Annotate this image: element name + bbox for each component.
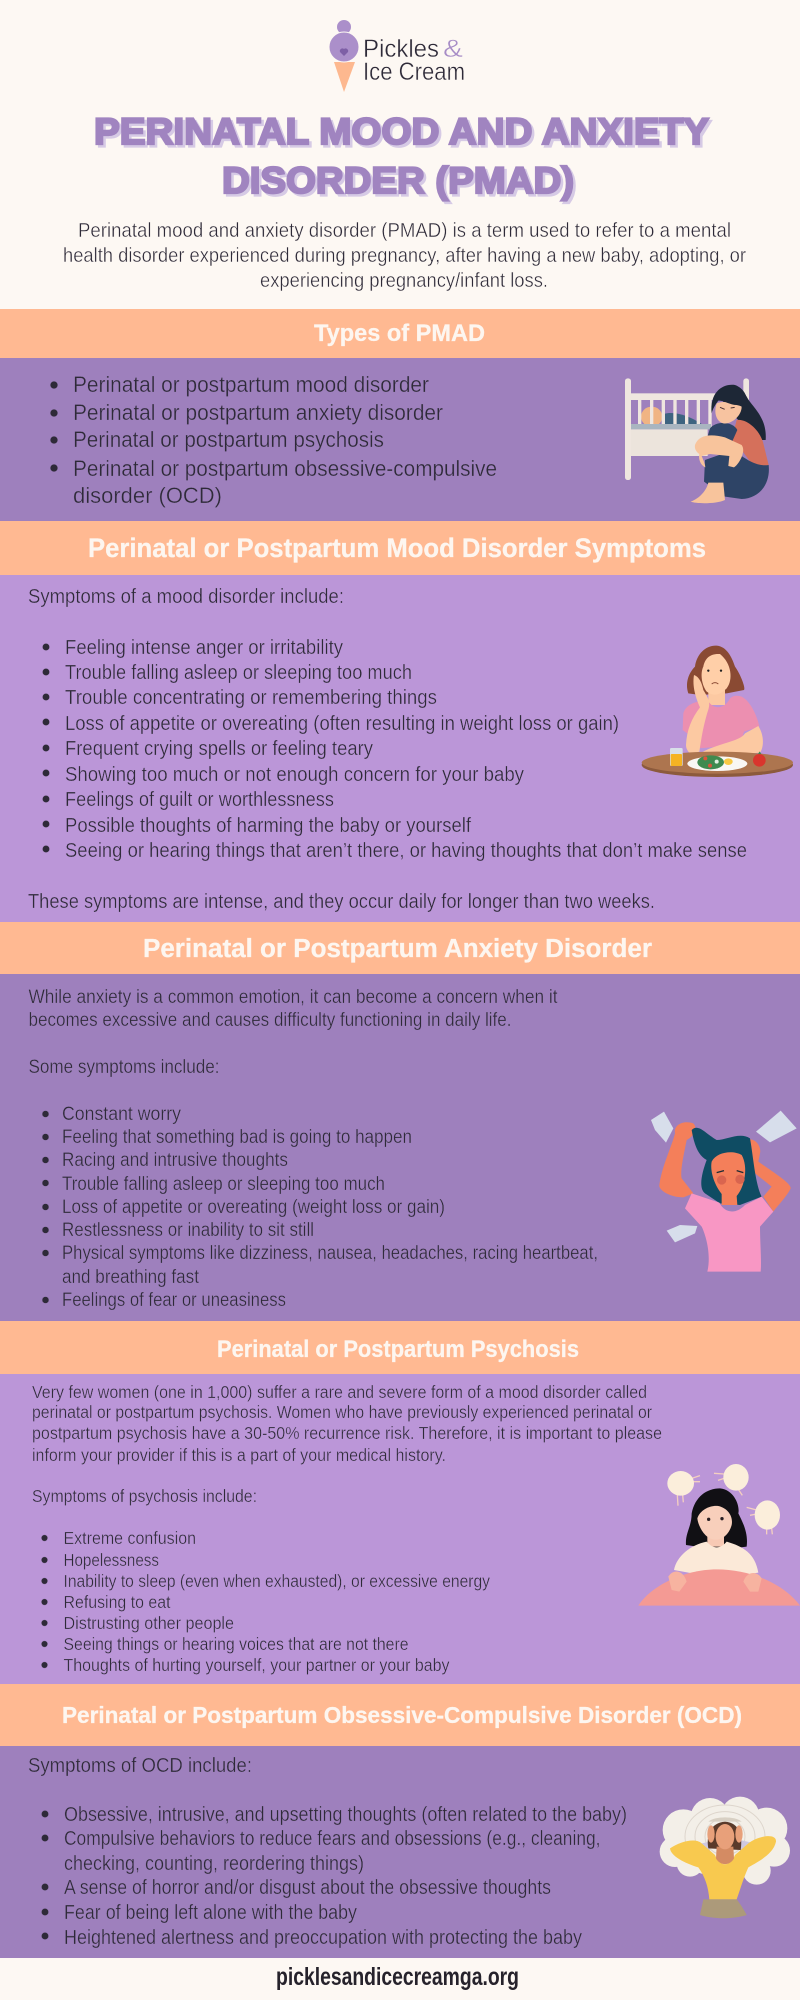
mood closing text: These symptoms are intense, and they occur daily for longer than two weeks. — [28, 891, 655, 913]
OCD symptom list: A sense of horror and/or disgust about the obsessive thoughts — [64, 1877, 551, 1899]
illustration: woman sitting beside crib — [625, 378, 769, 503]
anxiety intro text: becomes excessive and causes difficulty functioning in daily life. — [28, 1010, 512, 1031]
OCD symptom list: Heightened alertness and preoccupation with protecting the baby — [64, 1927, 582, 1949]
psychosis symptom list: Inability to sleep (even when exhausted), or excessive energy — [64, 1571, 490, 1591]
anxiety symptom list: and breathing fast — [62, 1267, 200, 1288]
mood symptom list — [42, 637, 747, 862]
icon: ice cream cone figure — [329, 20, 359, 92]
types list: Perinatal or postpartum anxiety disorder — [73, 400, 443, 425]
anxiety symptom list: Physical symptoms like dizziness, nausea, headaches, racing heartbeat, — [62, 1243, 598, 1264]
psychosis symptom list: Extreme confusion — [64, 1528, 196, 1548]
mood intro text: Symptoms of a mood disorder include: — [28, 586, 344, 608]
heading band: mood disorder symptoms: Perinatal or Postpartum Mood Disorder Symptoms — [88, 533, 706, 563]
anxiety symptom list: Racing and intrusive thoughts — [62, 1150, 288, 1171]
title — [94, 111, 712, 204]
intro paragraph: Perinatal mood and anxiety disorder (PMAD) is a term used to refer to a mental — [78, 219, 731, 242]
illustration: sad woman at table — [642, 646, 793, 777]
mood symptom list: Feelings of guilt or worthlessness — [65, 789, 334, 811]
heading band: Types of PMAD: Types of PMAD — [314, 320, 485, 347]
anxiety intro text: While anxiety is a common emotion, it can become a concern when it — [28, 987, 558, 1008]
psychosis panel body — [0, 1374, 800, 1684]
title: PERINATAL MOOD AND ANXIETY — [96, 114, 712, 154]
psychosis symptom list — [41, 1528, 490, 1675]
panel: anxiety disorder — [0, 922, 800, 1321]
OCD panel body — [0, 1746, 800, 1958]
panel: OCD — [0, 1684, 800, 1958]
OCD symptom list: Obsessive, intrusive, and upsetting thoughts (often related to the baby) — [64, 1804, 627, 1826]
anxiety intro text: Some symptoms include: — [28, 1057, 220, 1078]
logo wordmark: Pickles — [363, 35, 439, 63]
anxiety symptom list: Feeling that something bad is going to happen — [62, 1127, 412, 1148]
panel: types of PMAD — [0, 309, 800, 521]
illustration: overwhelmed woman holding head — [660, 1797, 790, 1918]
OCD symptom list — [41, 1804, 627, 1949]
panel: mood disorder symptoms — [0, 521, 800, 922]
logo: Pickles & Ice Cream — [329, 20, 465, 92]
illustration: stressed woman pulling hair — [651, 1111, 797, 1272]
heading band: anxiety disorder — [0, 922, 800, 974]
types list: disorder (OCD) — [73, 483, 222, 508]
heading band: OCD — [0, 1684, 800, 1746]
mood symptom list: Showing too much or not enough concern for your baby — [65, 764, 524, 786]
mood symptom list: Trouble concentrating or remembering things — [65, 687, 437, 709]
types list: Perinatal or postpartum obsessive-compulsive — [73, 456, 497, 481]
psychosis symptom list: Thoughts of hurting yourself, your partner or your baby — [64, 1655, 450, 1675]
logo wordmark: Ice Cream — [363, 58, 465, 86]
heading band: psychosis: Perinatal or Postpartum Psychosis — [217, 1336, 579, 1363]
title: PERINATAL MOOD AND ANXIETY — [94, 111, 709, 152]
logo wordmark — [363, 35, 465, 86]
types list: Perinatal or postpartum psychosis — [73, 427, 384, 452]
psychosis paragraph: postpartum psychosis have a 30-50% recurrence risk. Therefore, it is important to please — [32, 1423, 662, 1443]
mood symptom list: Frequent crying spells or feeling teary — [65, 738, 373, 760]
psychosis symptom list: Hopelessness — [64, 1550, 159, 1570]
types list — [50, 372, 497, 508]
anxiety symptom list — [42, 1104, 598, 1311]
heading band: anxiety disorder: Perinatal or Postpartum Anxiety Disorder — [143, 935, 652, 963]
mood panel body — [0, 575, 800, 922]
intro paragraph: experiencing pregnancy/infant loss. — [260, 269, 548, 292]
psychosis symptom list: Distrusting other people — [64, 1613, 234, 1633]
psychosis paragraph: Very few women (one in 1,000) suffer a rare and severe form of a mood disorder called — [32, 1382, 647, 1402]
anxiety symptom list: Constant worry — [62, 1104, 181, 1125]
OCD intro text: Symptoms of OCD include: — [28, 1755, 252, 1777]
footer website link: picklesandicecreamga.org — [276, 1963, 519, 1991]
mood symptom list: Possible thoughts of harming the baby or yourself — [65, 815, 471, 837]
heading band: OCD: Perinatal or Postpartum Obsessive-Compulsive Disorder (OCD) — [62, 1702, 742, 1728]
mood symptom list: Loss of appetite or overeating (often resulting in weight loss or gain) — [65, 713, 619, 735]
intro paragraph — [63, 219, 746, 292]
anxiety panel body — [0, 974, 800, 1321]
heading band: mood disorder symptoms — [0, 521, 800, 575]
psychosis symptom list: Seeing things or hearing voices that are not there — [64, 1634, 408, 1654]
panel: psychosis — [0, 1321, 800, 1684]
psychosis paragraph — [32, 1382, 662, 1506]
anxiety symptom list: Feelings of fear or uneasiness — [62, 1290, 286, 1311]
heading band: psychosis — [0, 1321, 800, 1374]
anxiety symptom list: Restlessness or inability to sit still — [62, 1220, 314, 1241]
anxiety symptom list: Trouble falling asleep or sleeping too much — [62, 1174, 385, 1195]
psychosis paragraph: inform your provider if this is a part of your medical history. — [32, 1445, 446, 1465]
OCD symptom list: checking, counting, reordering things) — [64, 1853, 364, 1875]
types list: Perinatal or postpartum mood disorder — [73, 372, 429, 397]
heading band: Types of PMAD — [0, 309, 800, 358]
types panel body — [0, 358, 800, 521]
anxiety intro text — [28, 987, 558, 1078]
psychosis symptom list: Refusing to eat — [64, 1592, 171, 1612]
psychosis paragraph: Symptoms of psychosis include: — [32, 1486, 257, 1506]
mood symptom list: Trouble falling asleep or sleeping too much — [65, 662, 412, 684]
anxiety symptom list: Loss of appetite or overeating (weight loss or gain) — [62, 1197, 445, 1218]
mood symptom list: Feeling intense anger or irritability — [65, 637, 343, 659]
illustration: sleepless woman counting sheep — [638, 1464, 800, 1606]
mood symptom list: Seeing or hearing things that aren’t there, or having thoughts that don’t make sense — [65, 840, 747, 862]
psychosis paragraph: perinatal or postpartum psychosis. Women who have previously experienced perinatal or — [32, 1402, 652, 1422]
title: DISORDER (PMAD) — [222, 160, 574, 201]
title: DISORDER (PMAD) — [224, 162, 576, 204]
logo wordmark: & — [443, 35, 463, 63]
OCD symptom list: Fear of being left alone with the baby — [64, 1902, 357, 1924]
OCD symptom list: Compulsive behaviors to reduce fears and obsessions (e.g., cleaning, — [64, 1828, 600, 1850]
